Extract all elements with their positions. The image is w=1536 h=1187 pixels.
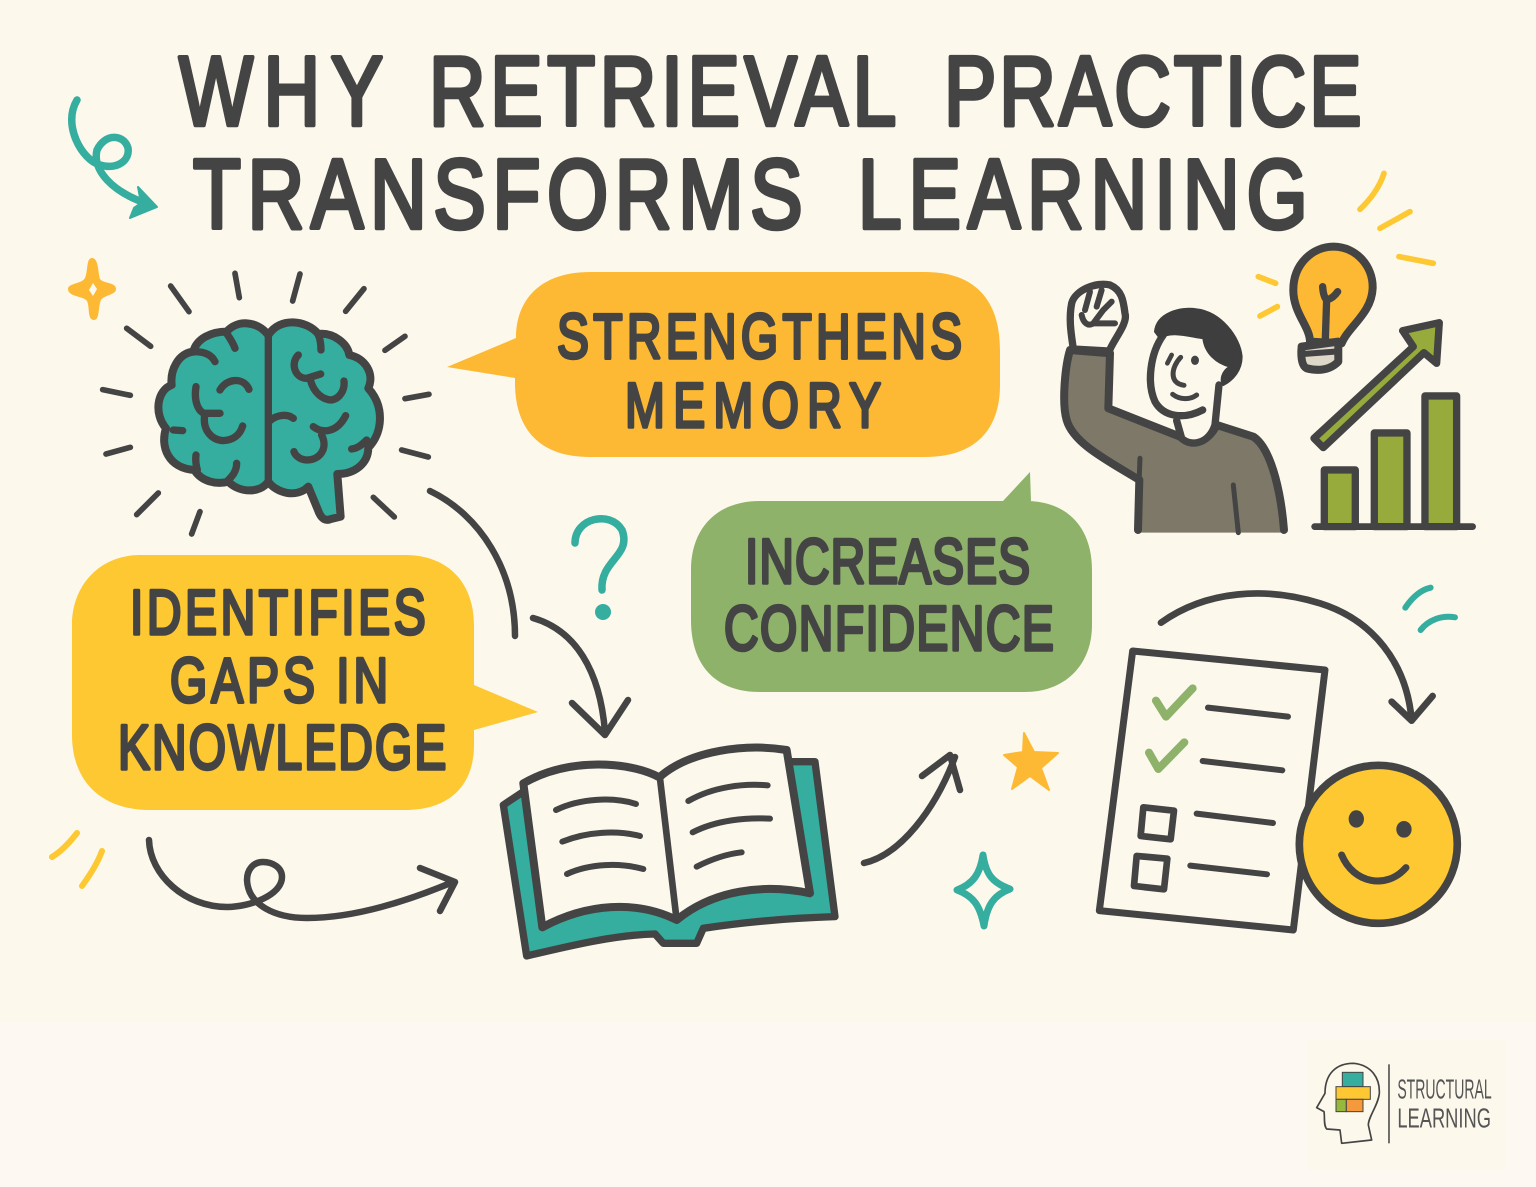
icon: person with raised fist [1064, 284, 1285, 533]
title: TRANSFORMS [193, 140, 803, 249]
logo wordmark: LEARNING [1397, 1103, 1491, 1134]
icon: glowing brain [103, 273, 429, 534]
icon: yellow dashes [52, 833, 102, 886]
arrow: down to book [533, 618, 628, 735]
icon: yellow light rays [1258, 173, 1433, 316]
title: WHY [179, 37, 383, 146]
person face [1150, 335, 1218, 442]
callout: increases confidence [691, 472, 1092, 692]
callout: increases confidence: INCREASES [745, 526, 1030, 597]
callout: increases confidence: CONFIDENCE [724, 593, 1054, 664]
person body [1064, 350, 1285, 533]
brain folds [173, 333, 367, 480]
icon: light bulb [1293, 247, 1373, 370]
title [179, 37, 1362, 249]
book text lines [556, 785, 770, 874]
list lines [1190, 708, 1288, 874]
callout: identifies gaps in knowledge [72, 555, 538, 810]
logo head [1317, 1063, 1379, 1143]
teal motion marks [1405, 588, 1455, 630]
person fist [1070, 284, 1125, 351]
icon: orange sparkle [68, 258, 116, 320]
arrow: brain curve [430, 491, 515, 636]
chart bars [1324, 396, 1457, 527]
logo blocks [1336, 1072, 1370, 1112]
icon: open book [503, 748, 835, 956]
callout: strengthens memory [447, 272, 1000, 457]
arrow: checklist to smiley [1161, 594, 1433, 721]
brain shape [158, 322, 380, 520]
callout: strengthens memory: STRENGTHENS [557, 301, 962, 372]
title: RETRIEVAL [429, 37, 896, 146]
empty checkboxes [1134, 807, 1174, 889]
icon: teal sparkle [957, 855, 1010, 926]
book cover [503, 762, 835, 956]
callout: strengthens memory: MEMORY [625, 370, 881, 441]
checklist paper [1099, 651, 1325, 930]
arrow: book to checklist [864, 755, 960, 863]
icon: checklist and smiley [1099, 588, 1457, 930]
book pages [523, 748, 810, 927]
arrow: loop to book [149, 840, 455, 918]
logo: Structural Learning [1307, 1040, 1505, 1170]
person hair [1155, 309, 1242, 385]
smiley face [1299, 765, 1457, 923]
callout: identifies gaps in knowledge: GAPS IN [170, 645, 388, 716]
title: PRACTICE [944, 37, 1362, 146]
icon: question mark [575, 519, 624, 620]
chart: growth bars with arrow [1314, 323, 1473, 527]
logo wordmark [1397, 1073, 1492, 1134]
callout: identifies gaps in knowledge: IDENTIFIES [130, 577, 426, 648]
icon: yellow star [1004, 733, 1058, 790]
checkmarks [1149, 688, 1193, 769]
brain rays [103, 273, 429, 534]
chart arrow [1314, 323, 1439, 448]
title: LEARNING [858, 140, 1308, 249]
icon: teal curly arrow [72, 100, 157, 218]
callout: identifies gaps in knowledge: KNOWLEDGE [118, 712, 446, 783]
